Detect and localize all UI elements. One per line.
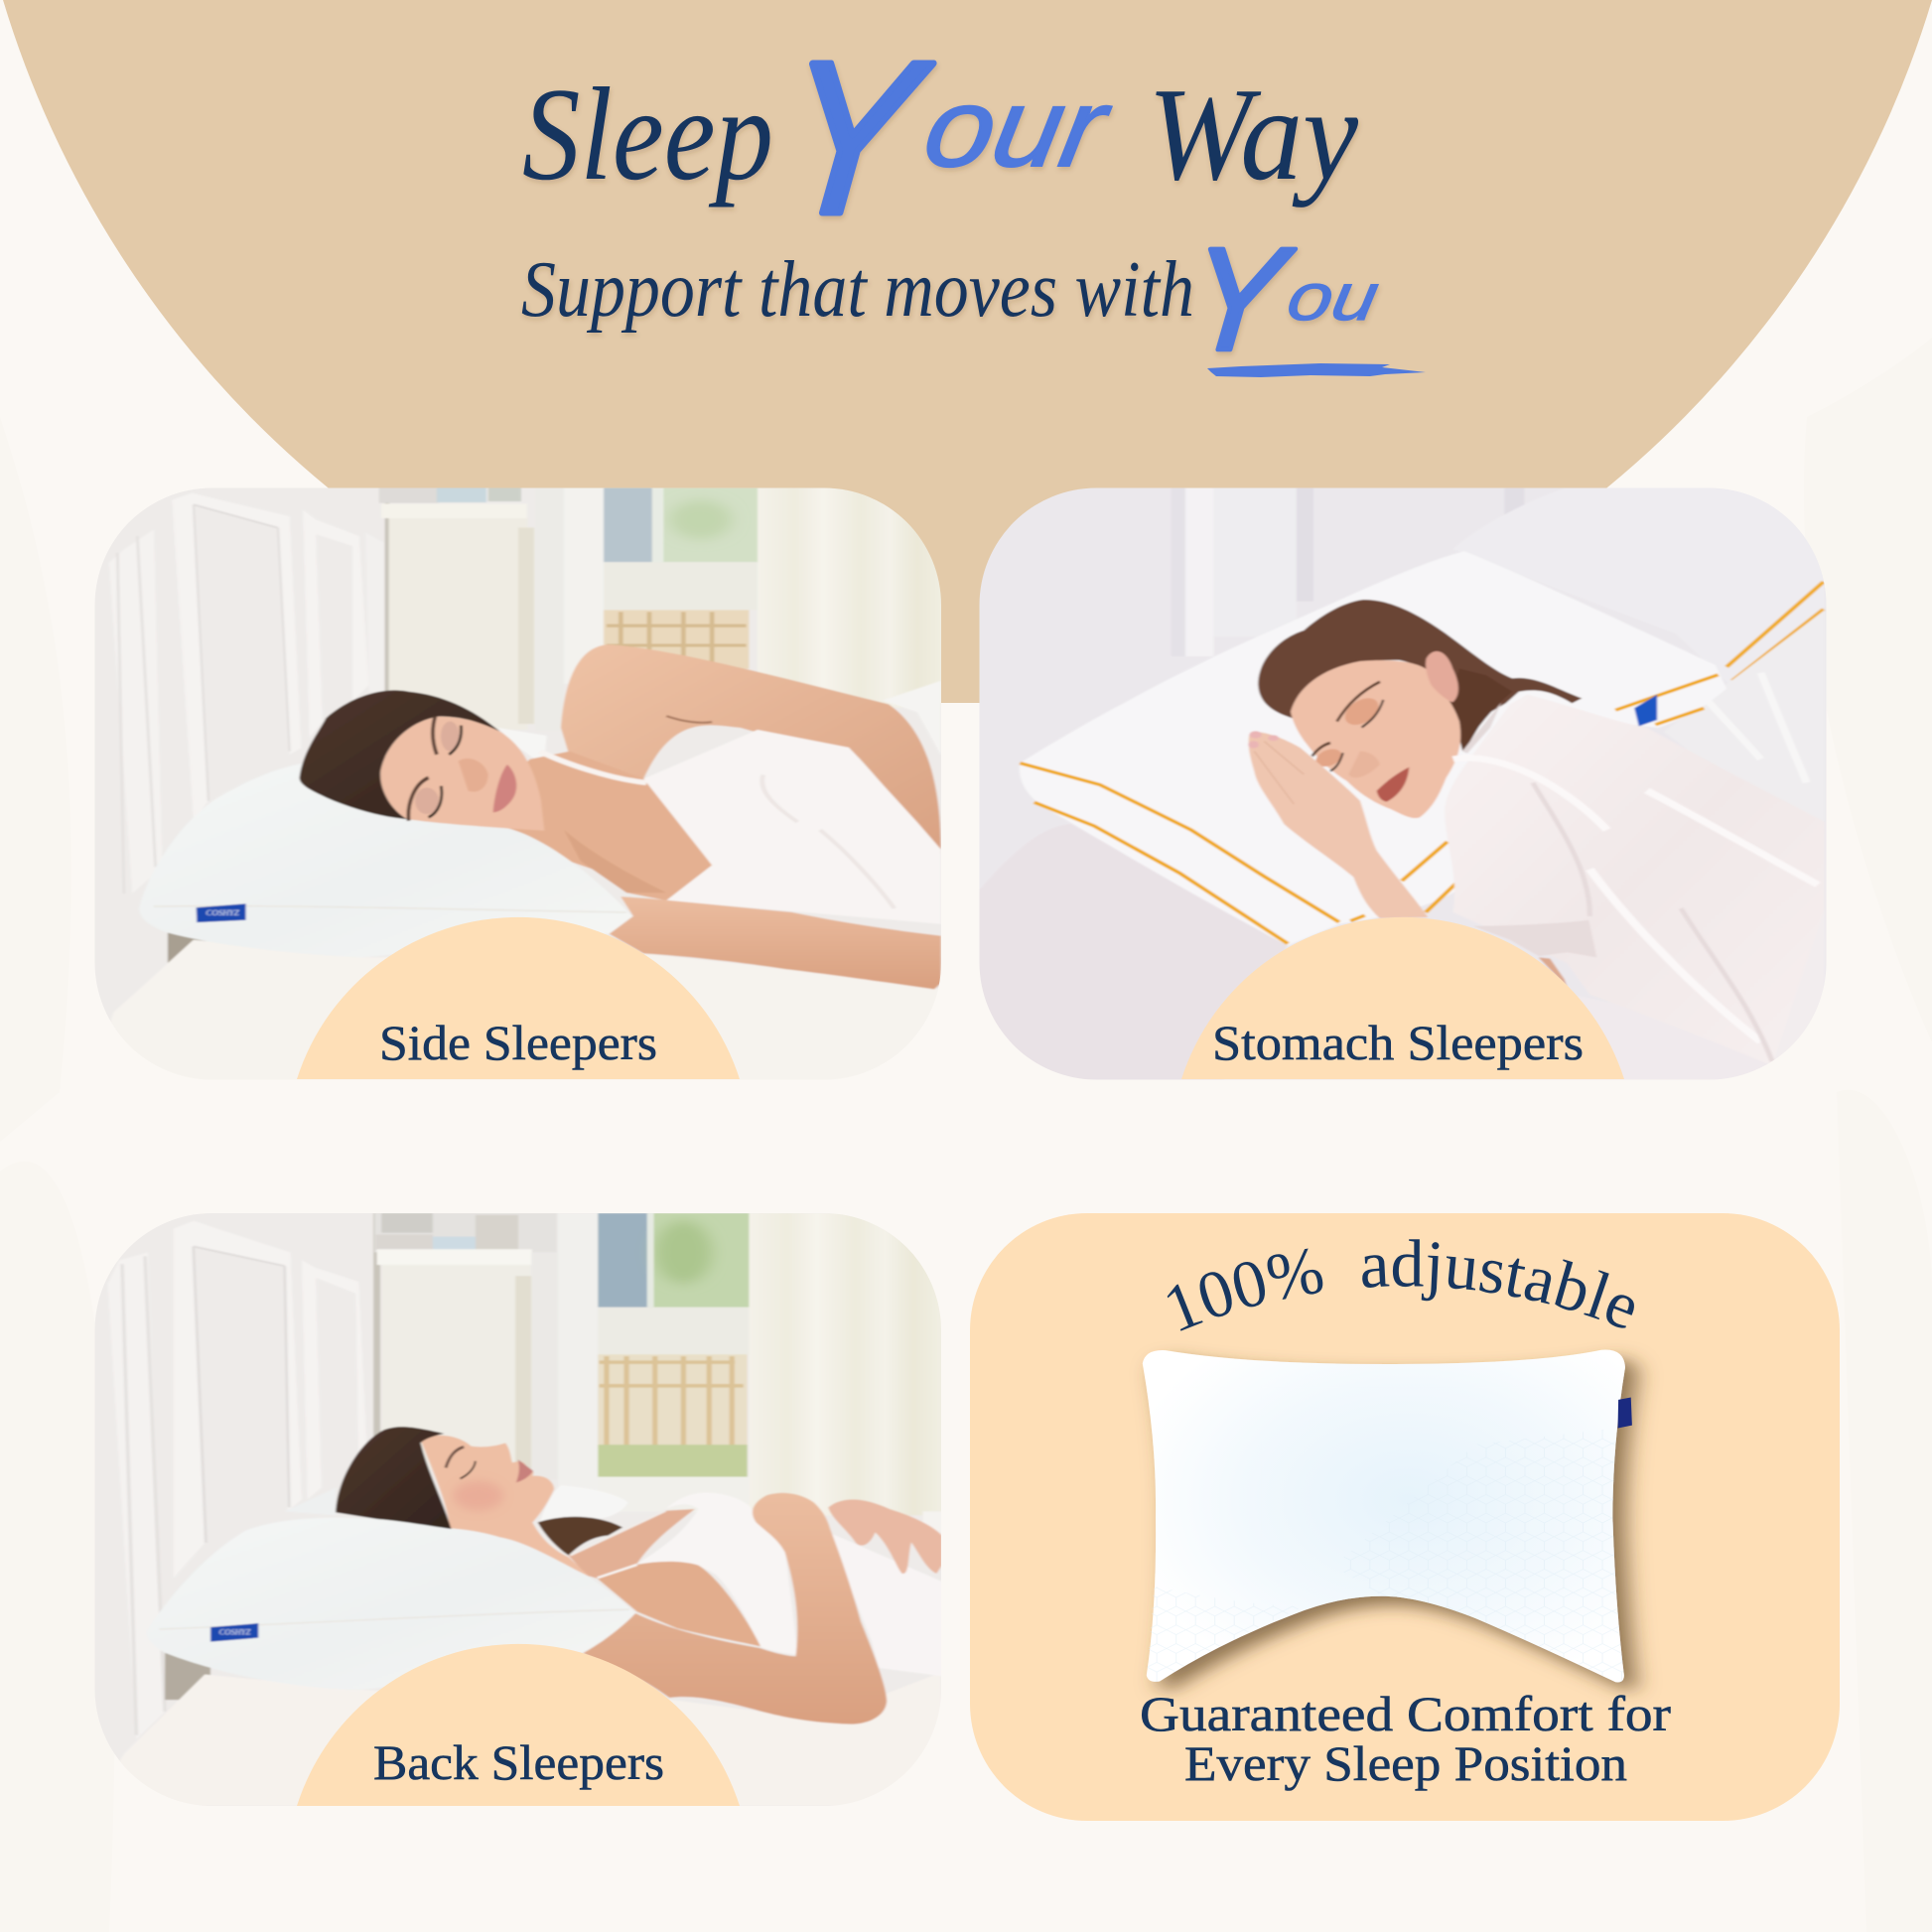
tag	[210, 1623, 258, 1642]
head	[300, 690, 544, 831]
subtitle text: Support that moves with	[521, 246, 1194, 334]
subtitle script word: You: Y	[1182, 217, 1300, 381]
subtitle script word: You	[1182, 217, 1384, 381]
caption: Guaranteed Comfort for Every Sleep Position	[1140, 1686, 1671, 1791]
label arch	[1181, 917, 1624, 1079]
chest	[509, 751, 713, 901]
icon: contour pillow	[1143, 1350, 1632, 1682]
heading word: Sleep: Sleep	[522, 61, 773, 207]
label: Stomach Sleepers: Stomach Sleepers	[1212, 1015, 1584, 1070]
bolster	[963, 824, 1288, 1089]
label: Side Sleepers: Side Sleepers	[379, 1015, 657, 1070]
sheet right	[1731, 610, 1826, 683]
subtitle: Support that moves with You	[521, 217, 1384, 381]
photo: woman stomach sleeping on gold-piped pillow	[963, 477, 1857, 1089]
head	[336, 1427, 590, 1577]
pillow tag	[1618, 1397, 1632, 1428]
body	[538, 1485, 943, 1725]
wall mouldings	[194, 488, 522, 692]
lace sleeve	[1473, 920, 1596, 957]
heading script word: Your: Y	[771, 18, 939, 259]
heading script word: Your	[771, 18, 1119, 259]
main pillow	[1020, 551, 1726, 946]
label: Back Sleepers: Back Sleepers	[373, 1734, 664, 1790]
panel: side sleepers	[79, 477, 973, 1089]
photo: woman back sleeping on pillow	[79, 1201, 973, 1822]
head and hand	[1248, 600, 1582, 918]
caption line 1: Guaranteed Comfort for	[1140, 1686, 1671, 1741]
heading word: Way: Way	[1148, 61, 1358, 207]
forearm	[610, 897, 941, 989]
panel: stomach sleepers	[963, 477, 1857, 1089]
wall mouldings	[135, 1247, 290, 1733]
header shape: tan arc	[3, 0, 1932, 703]
top	[643, 730, 941, 924]
title: Sleep Your Way	[522, 18, 1358, 259]
photo: woman back sleeping on pillow: COSHYZ	[219, 1628, 251, 1637]
label arch	[297, 1644, 740, 1806]
panel background	[970, 1213, 1840, 1821]
brush underline	[1207, 363, 1426, 377]
tag	[1634, 694, 1657, 726]
curved text: 100% adjustable: 100% adjustable	[1168, 1239, 1634, 1331]
pillow	[139, 763, 632, 957]
back pillow	[1504, 505, 1525, 542]
subtitle script word: You: ou	[1282, 260, 1384, 334]
upper arm	[561, 644, 941, 854]
robe	[1445, 694, 1825, 1065]
heading script word: Your: our	[916, 67, 1119, 191]
caption line 2: Every Sleep Position	[1184, 1735, 1627, 1791]
photo: woman side sleeping on pillow: COSHYZ	[206, 908, 240, 917]
pillow	[146, 1518, 635, 1690]
panel: adjustable pillow	[970, 1213, 1840, 1821]
photo: woman side sleeping on pillow	[95, 488, 941, 1021]
tag	[197, 903, 246, 922]
label arch	[297, 917, 740, 1079]
panel: back sleepers	[79, 1201, 973, 1822]
